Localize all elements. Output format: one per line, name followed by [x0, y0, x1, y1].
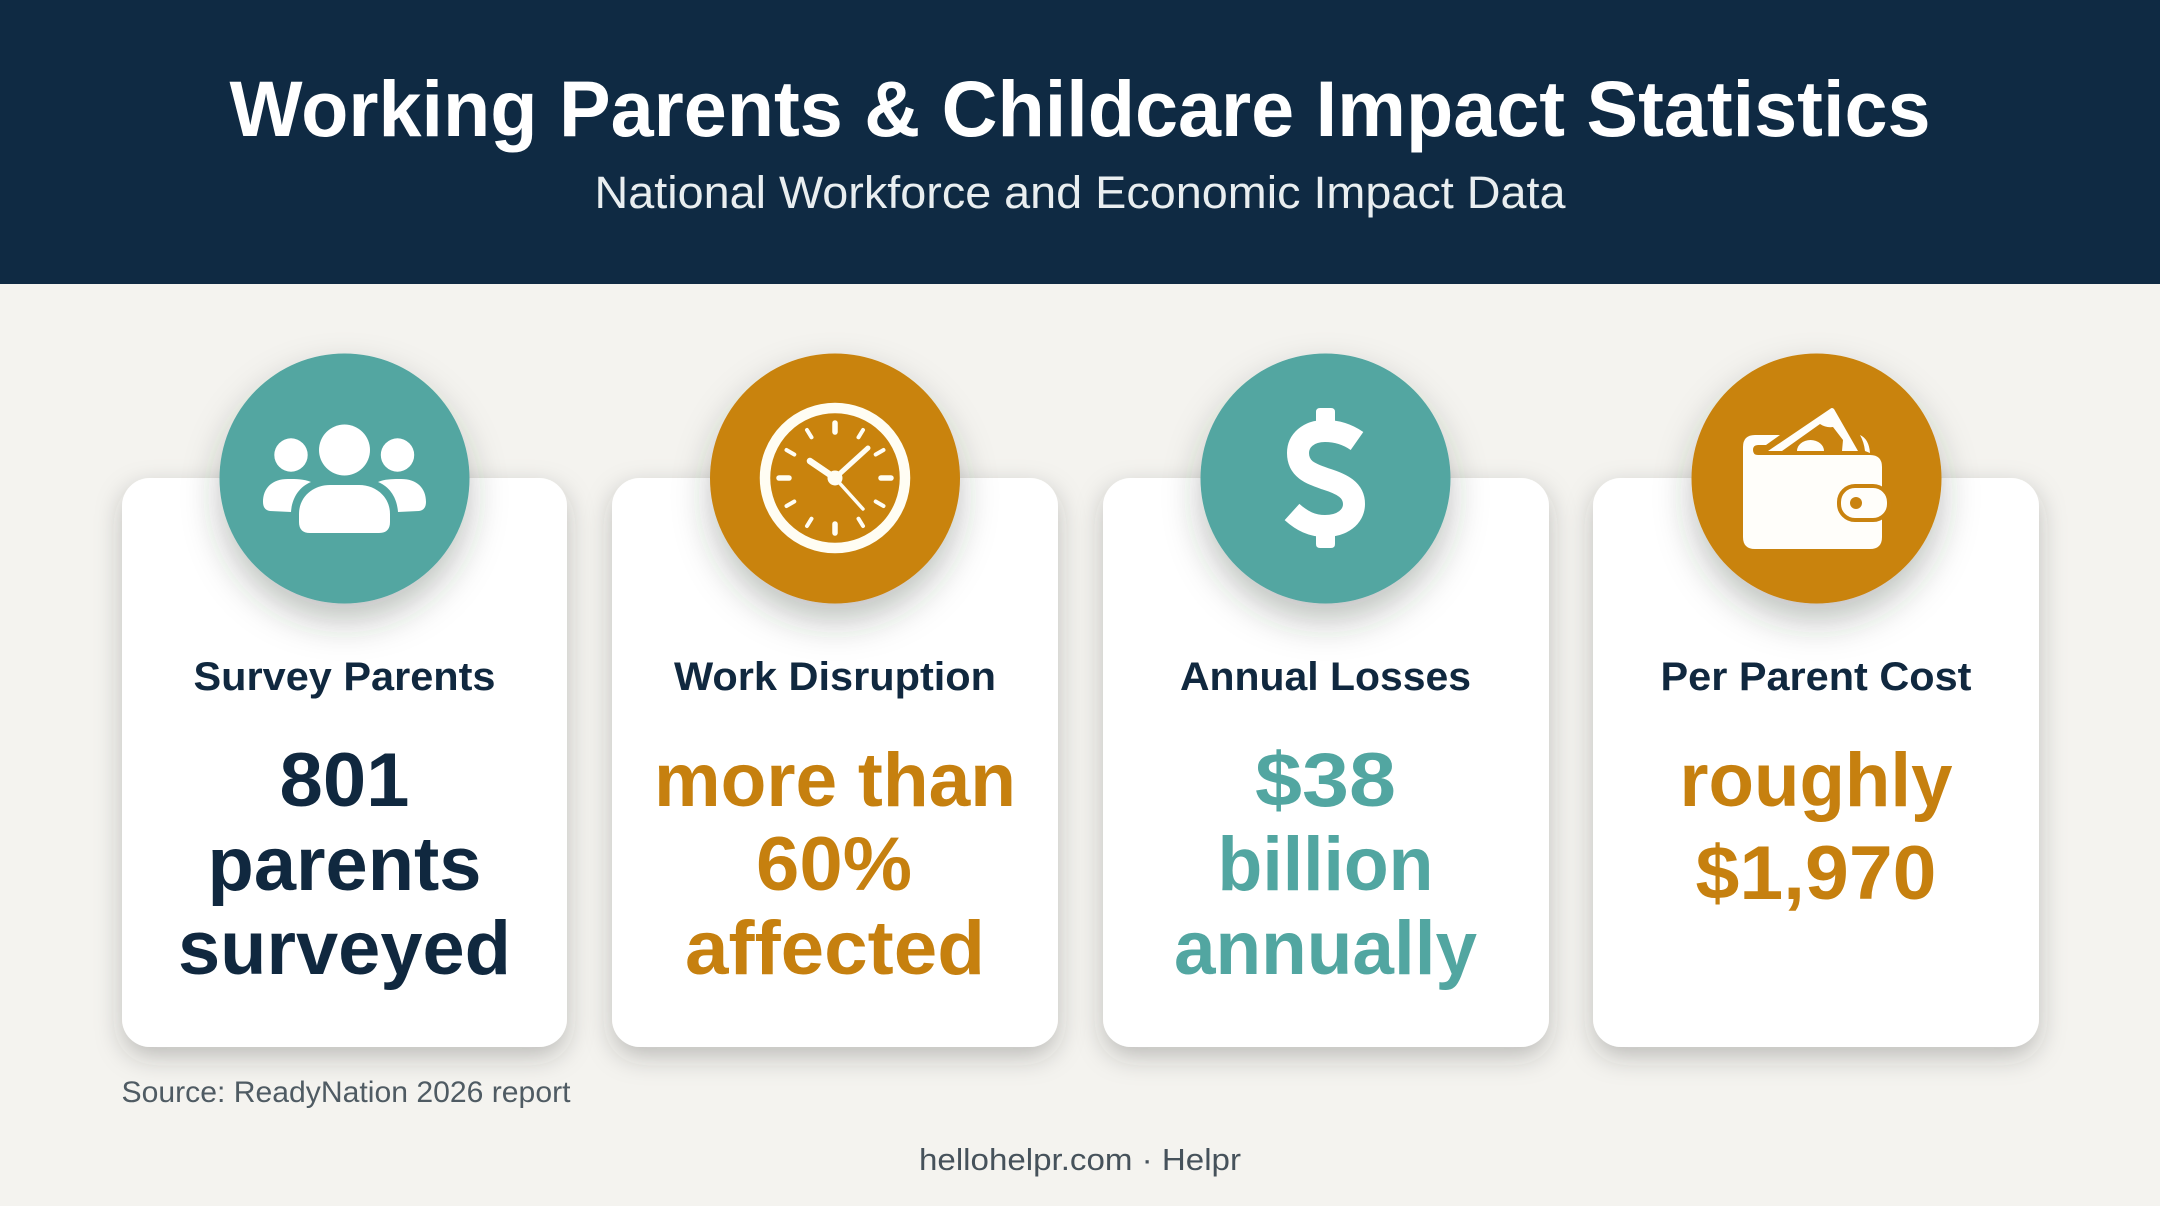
icon: wallet [1692, 354, 1942, 604]
statistic: more than 60% affected: affected [685, 906, 985, 991]
statistic: $38 billion annually [1174, 738, 1477, 991]
statistic: more than 60% affected: more than [654, 738, 1016, 823]
statistic: $38 billion annually: annually [1174, 906, 1477, 991]
source note: Source: ReadyNation 2026 report [122, 1076, 571, 1109]
card label: Work Disruption [674, 655, 996, 699]
icon: dollar sign [1200, 354, 1450, 604]
panel: per parent cost [1593, 354, 2039, 1047]
panel: work disruption [612, 354, 1058, 1047]
statistic: 801 parents surveyed: surveyed [178, 906, 511, 991]
icon: people [220, 354, 470, 604]
header banner [0, 0, 2160, 284]
statistic: $38 billion annually: $38 [1255, 738, 1396, 823]
statistic: 801 parents surveyed: 801 [280, 738, 410, 823]
statistic: roughly $1,970: roughly [1680, 738, 1952, 823]
statistic: 801 parents surveyed [178, 738, 511, 991]
statistic: roughly $1,970: $1,970 [1696, 831, 1936, 916]
statistic: $38 billion annually: billion [1218, 822, 1434, 907]
subtitle: National Workforce and Economic Impact Data [594, 167, 1567, 218]
card label: Per Parent Cost [1660, 655, 1972, 699]
footer credit: hellohelpr.com · Helpr [919, 1142, 1241, 1177]
panel: annual losses [1103, 354, 1549, 1047]
title: Working Parents & Childcare Impact Statistics [230, 64, 1930, 153]
card label: Annual Losses [1180, 655, 1471, 699]
statistic: more than 60% affected [654, 738, 1016, 991]
statistic: more than 60% affected: 60% [756, 822, 912, 907]
card label: Survey Parents [194, 655, 496, 699]
panel: survey parents [122, 354, 567, 1047]
statistic: 801 parents surveyed: parents [208, 822, 482, 907]
statistic: roughly $1,970 [1680, 738, 1952, 916]
icon: clock [710, 354, 960, 604]
